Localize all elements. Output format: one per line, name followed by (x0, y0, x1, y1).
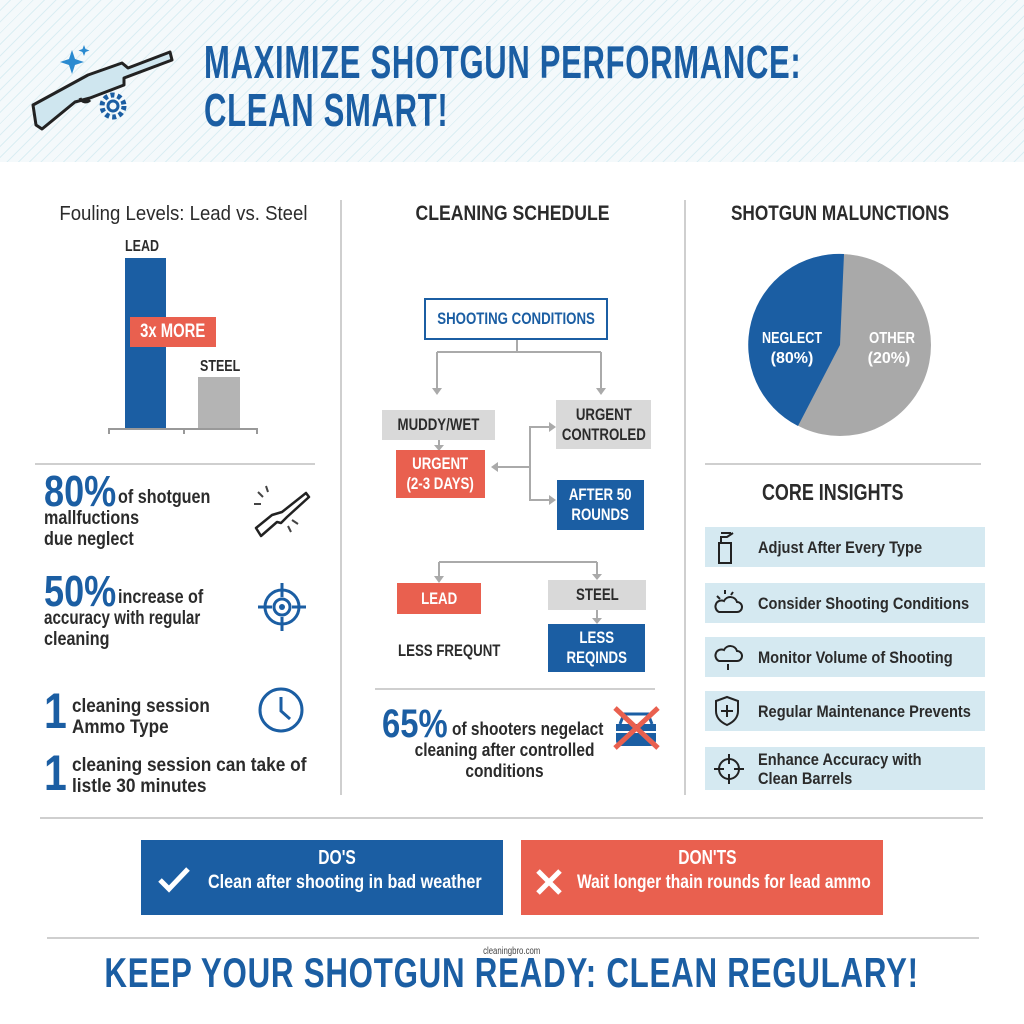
stat: 65% (382, 702, 660, 781)
panel: don'ts: Wait longer thain rounds for lead ammo (577, 872, 871, 893)
stat: 80%: 80% (44, 467, 116, 516)
stat: 65%: 65% (382, 702, 448, 746)
row: adjust (705, 527, 985, 567)
stat: 1 cleaning session 30 minutes: 1 (44, 745, 67, 801)
icon: cross (536, 869, 562, 895)
box: urgent controled (556, 400, 651, 449)
box: steel (548, 580, 646, 610)
footer headline: KEEP YOUR SHOTGUN READY: CLEAN REGULARY! (105, 949, 919, 996)
pie chart: NEGLECT (762, 330, 822, 347)
panel: don'ts (521, 840, 883, 915)
box: urgent controled: CONTROLED (562, 424, 645, 444)
stat: 50%: 50% (44, 567, 116, 616)
flowchart: cleaning schedule (382, 298, 651, 672)
row: maintenance: Regular Maintenance Prevents (758, 702, 971, 720)
panel: do's: Clean after shooting in bad weather (208, 872, 482, 893)
stat: 1 cleaning session ammo type: cleaning session (72, 696, 210, 717)
bar chart: STEEL (200, 358, 240, 375)
icon: crossed cleaning kit (613, 706, 660, 750)
heading: shotgun malunctions: SHOTGUN MALUNCTIONS (731, 202, 949, 225)
box: shooting conditions (424, 298, 608, 340)
icon: shotgun (254, 486, 310, 538)
row: volume (705, 637, 985, 677)
stat: 1 cleaning session ammo type: Ammo Type (72, 717, 169, 738)
stat: 50%: cleaning (44, 629, 110, 650)
pie chart: (80%) (771, 350, 813, 367)
stat: 80%: of shotguen (118, 487, 210, 508)
box: less reqinds: LESS (579, 628, 614, 647)
box: urgent 2-3 days: (2-3 DAYS) (407, 474, 474, 493)
bar chart: LEAD (125, 238, 159, 255)
row: accuracy: Clean Barrels (758, 768, 852, 788)
panel: fouling levels (59, 203, 307, 434)
panel: do's: DO'S (318, 847, 356, 869)
row: adjust: Adjust After Every Type (758, 538, 922, 556)
box: urgent 2-3 days: URGENT (412, 454, 468, 473)
title: CLEAN SMART! (204, 84, 448, 136)
title: MAXIMIZE SHOTGUN PERFORMANCE: (204, 36, 801, 88)
panel: do's (141, 840, 503, 915)
icon: check (158, 867, 190, 893)
heading: fouling levels: Fouling Levels: Lead vs. Steel (59, 203, 307, 225)
heading: cleaning schedule: CLEANING SCHEDULE (415, 202, 610, 225)
text: less frequnt: LESS FREQUNT (398, 641, 500, 660)
stat: 80%: mallfuctions (44, 508, 139, 529)
icon: clock (258, 688, 304, 732)
stat: 65%: of shooters negelact (452, 719, 603, 739)
source text: cleaningbro.com (483, 946, 541, 957)
box: steel: STEEL (576, 585, 618, 604)
icon: target (258, 583, 306, 631)
header band (0, 0, 1024, 162)
box: shooting conditions: SHOOTING CONDITIONS (437, 309, 595, 328)
panel: don'ts: DON'TS (678, 847, 736, 869)
callout: 3x more (130, 317, 216, 347)
stat: 50%: accuracy with regular (44, 608, 200, 629)
box: muddy/wet (382, 410, 495, 440)
icon: shotgun with sparkles and gear (32, 45, 174, 130)
pie chart (748, 254, 931, 436)
stat: 50% (44, 567, 306, 650)
row: accuracy: Enhance Accuracy with (758, 750, 922, 768)
stat: 65%: conditions (465, 761, 544, 781)
stat: 1 cleaning session 30 minutes: cleaning session can take of (72, 755, 306, 776)
box: lead: LEAD (421, 588, 457, 608)
stat: 1 cleaning session ammo type (44, 683, 304, 739)
pie chart: OTHER (869, 330, 915, 347)
row: conditions: Consider Shooting Conditions (758, 594, 969, 612)
title (204, 36, 801, 136)
box: muddy/wet: MUDDY/WET (398, 415, 479, 434)
row: maintenance (705, 691, 985, 731)
pie chart: (20%) (868, 350, 910, 367)
row: conditions (705, 583, 985, 623)
stat: 80% (44, 467, 310, 550)
stat: 65%: cleaning after controlled (415, 740, 594, 760)
box: after 50 rounds (557, 480, 644, 530)
box: less reqinds: REQINDS (566, 648, 627, 667)
column dividers (340, 200, 342, 795)
box: after 50 rounds: ROUNDS (572, 505, 629, 524)
stat: 1 cleaning session ammo type: 1 (44, 683, 67, 739)
row: volume: Monitor Volume of Shooting (758, 648, 953, 666)
bar chart (108, 238, 258, 434)
callout: 3x more: 3x MORE (140, 321, 206, 342)
heading: core insights: CORE INSIGHTS (762, 479, 904, 505)
box: less reqinds (548, 624, 645, 672)
box: after 50 rounds: AFTER 50 (569, 485, 632, 504)
stat: 50%: increase of (118, 587, 203, 608)
panel: core insights list (705, 527, 985, 790)
box: urgent controled: URGENT (576, 404, 631, 424)
box: urgent 2-3 days (396, 450, 485, 498)
stat: 1 cleaning session 30 minutes: listle 30 minutes (72, 776, 207, 797)
box: lead (397, 583, 481, 614)
stat: 80%: due neglect (44, 529, 134, 550)
row: accuracy (705, 747, 985, 790)
stat: 1 cleaning session 30 minutes (44, 745, 307, 801)
